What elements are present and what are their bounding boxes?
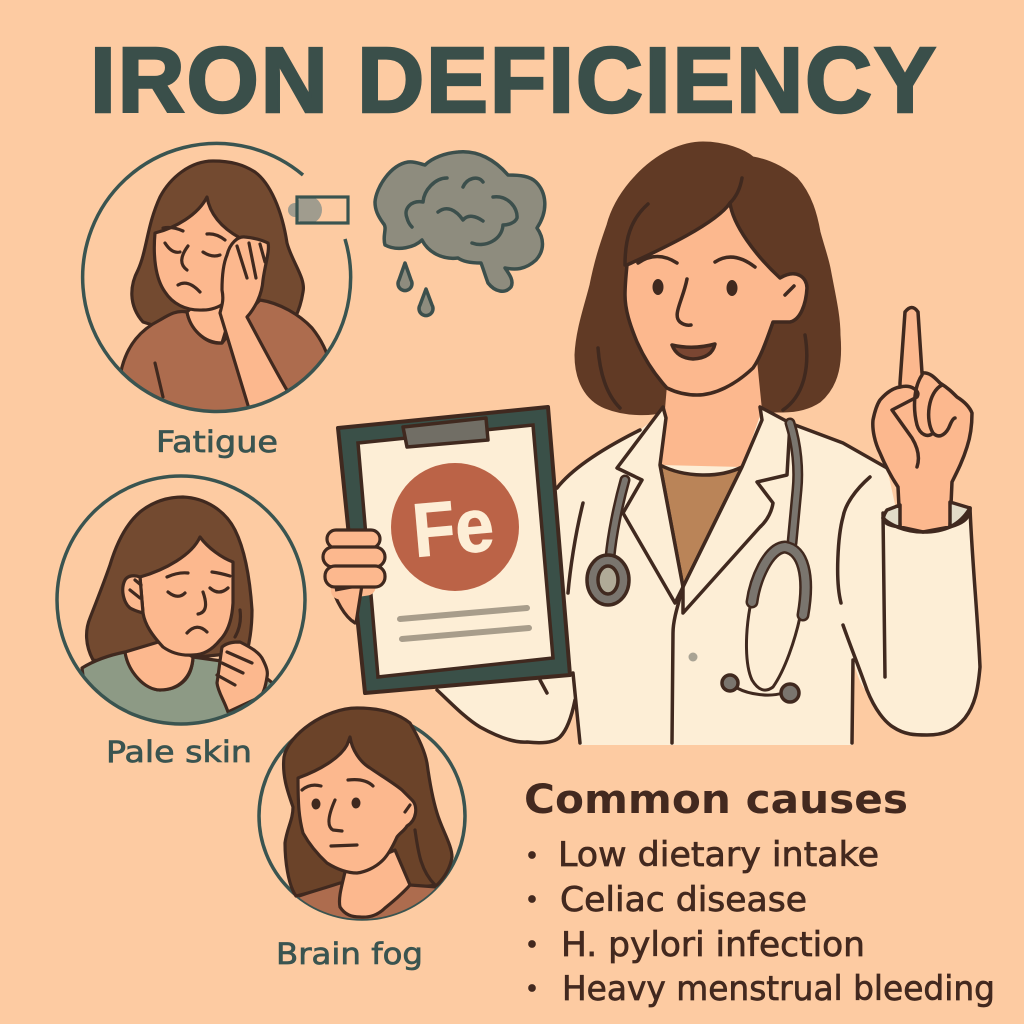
icon: low battery [288,196,348,224]
doctor shirt [660,465,742,587]
doctor facial features [638,256,794,359]
panel: pale skin [57,476,305,769]
ring: fatigue [83,143,351,411]
label: fatigue: Fatigue [156,425,278,459]
doctor neck [660,360,762,467]
doctor hair [575,142,841,415]
coat cuff [883,502,970,527]
doctor raised hand [873,308,972,532]
ring: pale skin [57,476,305,724]
icon: Fe badge: Fe [409,482,497,574]
icon: stethoscope [587,423,806,702]
causes list: Low dietary intake [558,835,879,875]
icon: brain cloud [375,152,545,316]
heading: common causes: Common causes [524,777,908,823]
doctor face [625,203,807,395]
causes list [528,835,995,1009]
hair strands [598,178,807,410]
label: pale skin: Pale skin [106,735,252,769]
panel: fatigue [83,143,351,459]
illustration: foggy woman [284,708,452,930]
panel: common causes [524,777,995,1009]
illustration: pale woman [82,497,275,730]
clipboard [323,407,570,693]
doctor coat [437,407,980,745]
coat lapels [617,407,683,603]
doctor left hand [323,530,385,623]
icon: Fe badge [391,463,519,591]
label: brain fog: Brain fog [276,937,423,971]
title: IRON DEFICIENCY [90,28,936,132]
illustration: fatigued woman [110,161,330,420]
coat button [688,652,698,662]
causes list: Celiac disease [560,880,807,920]
illustration: doctor [437,142,980,745]
panel: brain fog [259,708,465,971]
icon: rain drops [398,263,433,316]
document lines [400,608,529,639]
causes list: Heavy menstrual bleeding [562,969,995,1009]
coat outline [437,422,980,743]
ring: brain fog [259,713,465,919]
causes list: H. pylori infection [561,925,865,965]
